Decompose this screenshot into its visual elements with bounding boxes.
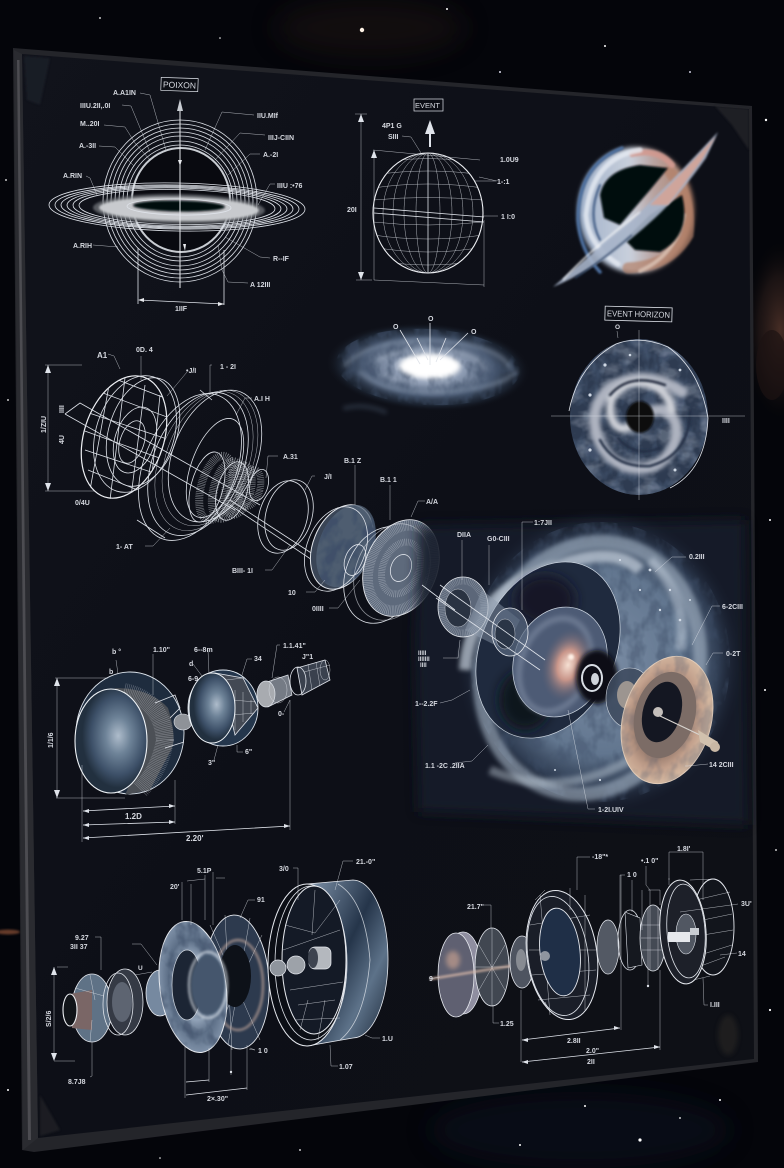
heading: photon label: [161, 77, 198, 92]
dimensions and labels: 20I: [347, 207, 357, 214]
labels and leaders: BIII- 1I: [232, 568, 253, 575]
labels and leaders: 1--2.2F: [415, 701, 438, 708]
dimensions and labels: •.1 0": [641, 858, 658, 865]
dimension bracket: 4U: [59, 435, 66, 444]
small hub: [63, 974, 112, 1042]
labels and leaders: 0-2T: [726, 651, 741, 658]
labels and leaders: 1- AT: [116, 544, 133, 551]
diagram: sphere cutaways: [48, 643, 330, 843]
leader lines and labels: A.-3II: [79, 143, 96, 150]
dense textured disc: [330, 508, 453, 635]
leader lines and labels: A.A1IN: [113, 90, 136, 97]
axis shaft: [65, 403, 345, 580]
large drum: [268, 880, 388, 1046]
dimensions and labels: d: [189, 661, 193, 668]
solid starry disc: [293, 495, 387, 601]
labels and leaders: A/A: [426, 499, 438, 506]
gear stack: [597, 905, 666, 974]
labels and leaders: G0-CIII: [487, 536, 510, 543]
labels and leaders: A.I H: [254, 396, 270, 403]
cylinder one: [257, 675, 292, 707]
glass lens: [146, 970, 174, 1016]
dimensions and labels: I.III: [710, 1002, 720, 1009]
radial disc: [475, 928, 509, 1006]
dimensions and labels: [46, 859, 393, 1103]
dimensions and labels: 3/0: [279, 866, 289, 873]
second cutaway sphere: [188, 670, 258, 746]
dimensions and labels: [48, 643, 313, 843]
dimensions and labels: [429, 846, 752, 1066]
leader lines and labels: A 12III: [250, 282, 270, 289]
dimensions and labels: 9: [429, 976, 433, 983]
crosshair and callouts: IIII: [722, 418, 730, 425]
dimensions and labels: b °: [112, 648, 121, 656]
dimensions and labels: 1.07: [339, 1064, 353, 1071]
coloured lens: [438, 932, 482, 1017]
labels and leaders: IIII: [420, 663, 427, 669]
dimensions and labels: 9.27: [75, 935, 89, 942]
swirl disc: [569, 339, 708, 495]
dimensions and labels: 1.10": [153, 647, 170, 654]
diagram: event sphere: [347, 99, 519, 287]
dimensions and labels: 1/1/6: [48, 732, 55, 748]
labels and leaders: DIIA: [457, 532, 471, 539]
dimensions and labels: J"1: [302, 654, 313, 661]
leader lines and labels: IIU.MIf: [257, 113, 279, 120]
labels and leaders: B.1 Z: [344, 458, 362, 465]
dimensions and labels: 6--8m: [194, 647, 213, 654]
dimensions and labels: 20': [170, 884, 180, 891]
crosshair and callouts: O: [615, 324, 620, 331]
galaxy callouts: O: [393, 324, 399, 331]
leader lines and labels: IIIU.2II,.0I: [80, 103, 110, 110]
ghost wireframe hubs: [422, 577, 545, 670]
plug: [174, 714, 192, 730]
glass disc pair: [151, 913, 272, 1057]
galaxy callouts: O: [471, 329, 477, 336]
dimensions and labels: 2.0": [586, 1048, 599, 1055]
dimension bracket: IIII: [59, 405, 66, 413]
leader lines and labels: R--IF: [273, 256, 290, 263]
geared cylinder: [182, 448, 272, 526]
dimension bracket: [41, 365, 95, 507]
leader lines and labels: 1IIF: [175, 306, 188, 313]
dimension bracket: 1/ZIU: [41, 416, 48, 433]
dimensions and labels: 34: [254, 656, 262, 663]
leader lines and labels: A.RIH: [73, 243, 92, 250]
dimensions and labels: 0-: [278, 711, 285, 718]
dimensions and labels: 1.25: [500, 1021, 514, 1028]
dimensions and labels: U: [138, 965, 143, 972]
heading: event horizon label: EVENT HORIZON: [607, 308, 670, 320]
dimension bracket: 0/4U: [75, 500, 90, 507]
dimensions and labels: 3": [208, 760, 215, 767]
dimensions and labels: 1.2D: [125, 812, 142, 821]
galaxy callouts: [393, 316, 477, 365]
dimensions and labels: 2.8II: [567, 1038, 581, 1045]
central beam: [430, 958, 560, 979]
labels and leaders: 1-2I.UIV: [598, 807, 624, 814]
leader lines and labels: A.-2I: [263, 152, 278, 159]
labels and leaders: A1: [97, 351, 108, 360]
dimensions and labels: 5.1P: [197, 868, 212, 875]
dimensions and labels: 6-9: [188, 676, 198, 683]
dimensions and labels: 3U': [741, 901, 752, 908]
leader lines and labels: [63, 90, 303, 313]
heading: photon label: POIXON: [163, 79, 196, 91]
dimensions and labels: [347, 114, 519, 287]
labels and leaders: 0IIII: [312, 606, 324, 613]
labels and leaders: A.31: [283, 454, 298, 461]
labels and leaders: J/I: [324, 474, 332, 481]
big ring: [119, 376, 280, 556]
wireframe globe: [373, 153, 484, 273]
shaft hubs: [270, 947, 331, 976]
leader lines and labels: M..20I: [80, 121, 100, 128]
wireframe disc one: [80, 375, 180, 499]
dimensions and labels: S/2/6: [46, 1011, 53, 1027]
labels and leaders: 1 - 2I: [220, 364, 236, 371]
dimensions and labels: 21.7": [467, 904, 484, 911]
labels and leaders: •J/I: [186, 368, 196, 375]
illustration: spiral galaxy: [324, 316, 532, 416]
dimensions and labels: 1 0: [258, 1048, 268, 1055]
arrow up: [425, 120, 435, 147]
dimensions and labels: 1 I:0: [501, 214, 515, 221]
accretion disc: [49, 181, 305, 233]
leader lines and labels: A.RIN: [63, 173, 82, 180]
small lens: [510, 936, 534, 988]
diagram: photon ring with accretion disc: [49, 77, 305, 313]
large cutaway sphere: [75, 672, 184, 795]
dimensions and labels: b: [109, 669, 113, 676]
leader lines and labels: IIIJ-CIIN: [268, 135, 294, 142]
labels and leaders: 1:7JII: [534, 520, 552, 527]
labels and leaders: 14 2CIII: [709, 762, 734, 769]
labels and leaders: B.1 1: [380, 477, 397, 484]
dimensions and labels: 2II: [587, 1059, 595, 1066]
heading: event label: EVENT: [415, 101, 440, 110]
dark inner funnel: [448, 538, 648, 762]
diagram: exploded wireframe assembly: [41, 347, 453, 635]
central axis arrow: [177, 99, 186, 288]
galaxy callouts: O: [428, 316, 434, 323]
diagram: bottom-right wire assembly: [429, 846, 752, 1066]
labels and leaders: IIIII: [418, 651, 427, 657]
labels and leaders: 10: [288, 590, 296, 597]
dimensions and labels: 1.0U9: [500, 157, 519, 164]
illustration: event horizon: [551, 306, 745, 500]
heading: event horizon label: [605, 306, 672, 322]
dimensions and labels: 14: [738, 951, 746, 958]
peach disc and plug: [606, 645, 727, 795]
labels and leaders: [415, 520, 743, 814]
illustration: large nebula swirl with peach disc: [415, 509, 748, 825]
concentric shell rings: [103, 120, 257, 282]
thin ring: [250, 474, 321, 559]
labels and leaders: [97, 347, 438, 613]
dimensions and labels: -18"*: [592, 854, 608, 861]
labels and leaders: 6-2CIII: [722, 604, 743, 611]
labels and leaders: IIIIIII: [418, 657, 430, 663]
labels and leaders: 0.2III: [689, 554, 705, 561]
crosshair and callouts: [551, 324, 745, 500]
gear ring: [103, 969, 143, 1035]
dimensions and labels: 1.1.41": [283, 643, 306, 650]
dimensions and labels: SIII: [388, 134, 399, 141]
dimensions and labels: 91: [257, 897, 265, 904]
labels and leaders: 0D. 4: [136, 347, 153, 354]
framed ring: [518, 886, 606, 1024]
labels and leaders: 1.1 -2C .2IIA: [425, 763, 465, 770]
dimensions and labels: 2.20': [186, 834, 204, 843]
dimensions and labels: 1-:1: [497, 179, 510, 186]
dimensions and labels: 2×.30": [207, 1096, 228, 1103]
leader lines and labels: IIIU :•76: [277, 183, 303, 190]
rear cylinder: [656, 879, 734, 985]
dimensions and labels: 8.7J8: [68, 1079, 86, 1086]
dimensions and labels: 21.-0": [356, 859, 375, 866]
dimensions and labels: 4P1 G: [382, 123, 402, 130]
heading: event label: [414, 99, 443, 111]
dimensions and labels: 1.8I': [677, 846, 691, 853]
dimensions and labels: 1 0: [627, 872, 637, 879]
dimensions and labels: 6": [245, 749, 252, 756]
cylinder two: [290, 660, 330, 695]
diagram: bottom-left glass assembly: [46, 859, 393, 1103]
dimensions and labels: 3II 37: [70, 944, 88, 951]
dimensions and labels: 1.U: [382, 1036, 393, 1043]
illustration: black hole with jet: [553, 132, 718, 287]
